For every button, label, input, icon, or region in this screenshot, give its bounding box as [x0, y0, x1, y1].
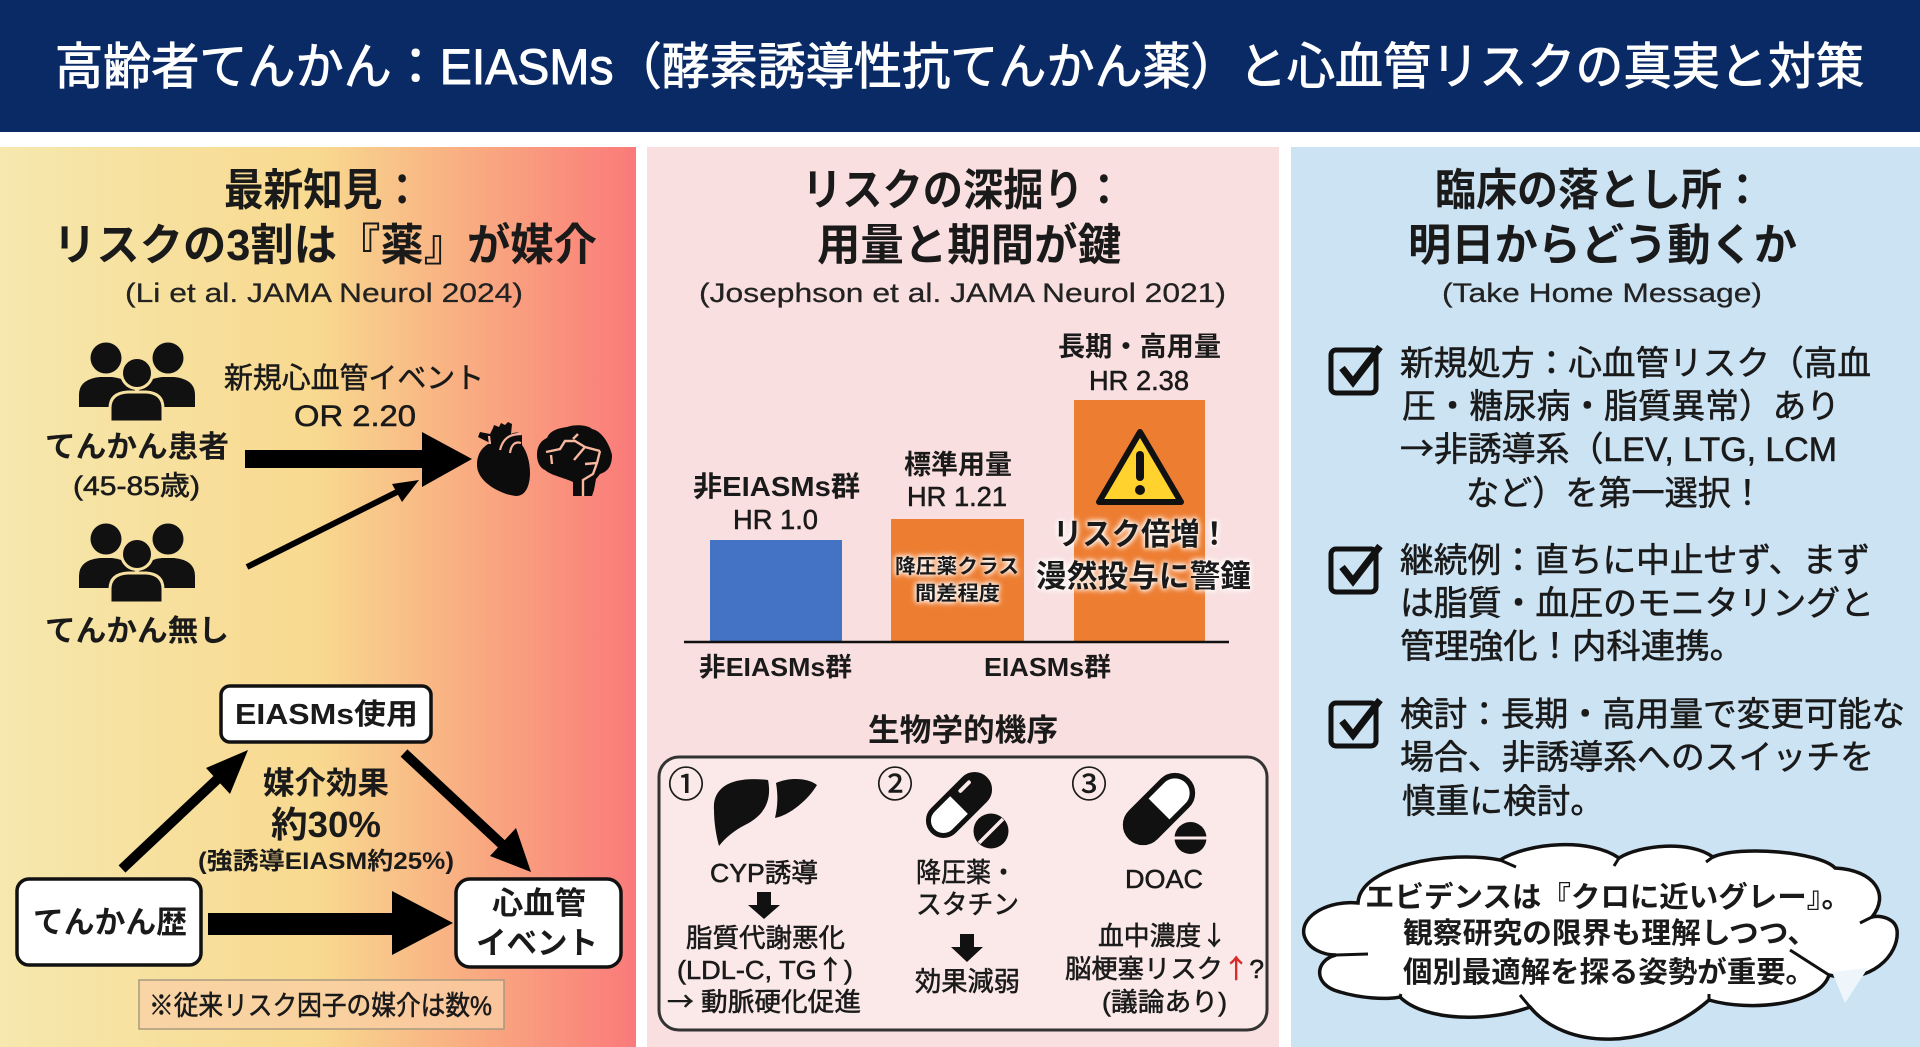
heading: clinical takeaways: 明日からどう動くか	[1408, 221, 1797, 270]
arrow: thin controls to outcome	[247, 480, 419, 567]
title: 高齢者てんかん：EIASMs（酵素誘導性抗てんかん薬）と心血管リスクの真実と対策	[55, 39, 1864, 95]
mechanism 3: DOAC	[1065, 764, 1264, 1017]
takeaway: new prescriptions: 新規処方：心血管リスク（高血	[1400, 345, 1871, 383]
label: long term high dose HR: 長期・高用量	[1058, 332, 1221, 362]
box: epilepsy history	[17, 879, 201, 965]
label: long term high dose HR	[1058, 332, 1221, 396]
takeaway: consider switching: 慎重に検討。	[1402, 783, 1604, 821]
takeaway: consider switching: 場合、非誘導系へのスイッチを	[1400, 739, 1874, 777]
label: mediation effect: 約30%	[271, 804, 381, 845]
box: EIASMs use	[221, 686, 431, 742]
label: new CV events OR	[224, 362, 484, 433]
mechanism 1: CYP induction: → 動脈硬化促進	[667, 982, 861, 1019]
icon: no epilepsy group	[79, 524, 195, 603]
label: no epilepsy: てんかん無し	[45, 615, 229, 648]
icon: warning triangle	[1099, 432, 1181, 502]
label: non EIASMs HR: HR 1.0	[733, 504, 818, 535]
icon: capsule with tablet	[921, 767, 1008, 848]
label: non EIASMs HR	[693, 471, 860, 535]
arrow: epilepsy to CV events	[208, 891, 453, 955]
note: conventional risk factors: ※従来リスク因子の媒介は数%	[149, 991, 492, 1021]
takeaway: new prescriptions: 圧・糖尿病・脂質異常）あり	[1402, 388, 1840, 426]
takeaway: consider switching	[1331, 696, 1905, 821]
label: epilepsy patients	[45, 431, 229, 501]
mechanism 2: antihypertensives and statins	[877, 764, 1020, 997]
takeaway: new prescriptions	[1331, 345, 1871, 513]
icon: checkbox	[1331, 347, 1380, 393]
annotation: antihypertensive class: 降圧薬クラス	[895, 555, 1019, 578]
panel: latest findings	[0, 147, 636, 1047]
mechanism 2: antihypertensives and statins: 降圧薬・	[916, 858, 1016, 888]
takeaway: new prescriptions: など）を第一選択！	[1466, 475, 1764, 513]
label: non EIASMs HR: 非EIASMs群	[693, 471, 860, 502]
box: CV events	[456, 879, 621, 967]
bar chart: hazard ratios	[684, 332, 1251, 682]
mechanism 1: CYP induction: (LDL-C, TG↑)	[677, 950, 853, 987]
box: CV events: イベント	[476, 926, 598, 961]
callout: evidence cloud: エビデンスは『クロに近いグレー』。	[1365, 880, 1851, 914]
label: mediation effect	[198, 766, 454, 875]
label: long term high dose HR: HR 2.38	[1089, 365, 1189, 396]
mechanism 3: DOAC: DOAC	[1125, 864, 1203, 894]
bar: long term high dose	[1074, 400, 1205, 641]
heading: risk deep dive	[802, 166, 1124, 270]
heading: clinical takeaways: 臨床の落とし所：	[1435, 166, 1763, 215]
heading: risk deep dive: リスクの深掘り：	[802, 166, 1124, 215]
box: EIASMs use: EIASMs使用	[235, 698, 418, 731]
axis label: EIASMs: EIASMs群	[984, 652, 1111, 682]
icon: brain	[537, 425, 612, 496]
header banner	[0, 0, 1920, 132]
mechanism 1: CYP induction: 脂質代謝悪化	[686, 923, 845, 953]
bar: non EIASMs	[710, 540, 842, 641]
arrow: thick patients to outcome	[245, 432, 472, 487]
callout: evidence cloud: 観察研究の限界も理解しつつ、	[1403, 917, 1817, 950]
mechanism 1: CYP induction	[667, 764, 861, 1019]
callout: evidence cloud	[1304, 845, 1897, 1039]
citation: Li et al: (Li et al. JAMA Neurol 2024)	[125, 278, 523, 308]
label: new CV events OR: 新規心血管イベント	[224, 362, 484, 395]
axis label: non EIASMs: 非EIASMs群	[699, 652, 852, 682]
arrow: epilepsy to EIASMs	[122, 750, 248, 869]
takeaway: continuing patients: 管理強化！内科連携。	[1400, 628, 1744, 666]
box: mechanisms	[659, 757, 1267, 1030]
mechanism 3: DOAC: (議論あり)	[1102, 987, 1227, 1017]
mechanism 3: DOAC: 脳梗塞リスク↑?	[1065, 949, 1264, 986]
panel: clinical takeaways	[1291, 147, 1920, 1047]
icon: liver	[714, 779, 817, 846]
annotation: antihypertensive class	[895, 555, 1019, 605]
label: mediation effect: (強誘導EIASM約25%)	[198, 848, 454, 875]
icon: checkbox	[1331, 546, 1380, 592]
mechanism 3: DOAC: 血中濃度↓	[1098, 916, 1227, 953]
annotation: antihypertensive class: 間差程度	[915, 582, 1000, 605]
heading: biological mechanism: 生物学的機序	[868, 713, 1058, 748]
label: standard dose HR	[904, 450, 1012, 512]
takeaway: new prescriptions: →非誘導系（LEV, LTG, LCM	[1400, 422, 1837, 471]
mechanism 2: antihypertensives and statins: 効果減弱	[915, 967, 1020, 997]
label: mediation effect: 媒介効果	[263, 766, 389, 801]
mechanism 2: antihypertensives and statins: ②	[877, 764, 913, 805]
icon: heart	[477, 422, 530, 496]
annotation: risk doubling	[1036, 517, 1251, 594]
heading: clinical takeaways	[1408, 166, 1797, 270]
note: conventional risk factors	[139, 980, 504, 1029]
mechanism 1: CYP induction: ①	[668, 764, 704, 805]
takeaway: continuing patients	[1331, 542, 1874, 666]
icon: checkbox	[1331, 700, 1380, 746]
bar: standard dose	[891, 519, 1024, 641]
heading: risk deep dive: 用量と期間が鍵	[817, 221, 1121, 270]
label: new CV events OR: OR 2.20	[294, 400, 416, 433]
icon: epilepsy patients group	[79, 342, 195, 422]
label: standard dose HR: 標準用量	[904, 450, 1012, 480]
icon: capsule with round tablet	[1115, 767, 1207, 854]
arrow: EIASMs to CV events	[404, 753, 531, 872]
mechanism 3: DOAC: ③	[1071, 764, 1107, 805]
callout: evidence cloud: 個別最適解を探る姿勢が重要。	[1403, 955, 1815, 989]
takeaway: continuing patients: 継続例：直ちに中止せず、まず	[1400, 542, 1870, 580]
citation: take home message: (Take Home Message)	[1442, 278, 1762, 308]
panel: risk deep dive	[647, 147, 1279, 1047]
label: standard dose HR: HR 1.21	[907, 481, 1007, 512]
mechanism 2: antihypertensives and statins: スタチン	[916, 890, 1019, 920]
label: epilepsy patients: (45-85歳)	[73, 471, 200, 501]
annotation: risk doubling: 漫然投与に警鐘	[1036, 559, 1251, 594]
heading: latest findings: リスクの3割は『薬』が媒介	[53, 221, 597, 270]
takeaway: continuing patients: は脂質・血圧のモニタリングと	[1400, 585, 1874, 623]
takeaway: consider switching: 検討：長期・高用量で変更可能な	[1400, 696, 1905, 734]
annotation: risk doubling: リスク倍増！	[1053, 517, 1229, 552]
citation: Josephson et al: (Josephson et al. JAMA Neurol 2021)	[699, 278, 1226, 308]
box: CV events: 心血管	[492, 886, 586, 921]
heading: latest findings: 最新知見：	[224, 166, 422, 215]
label: epilepsy patients: てんかん患者	[45, 431, 229, 464]
heading: latest findings	[53, 166, 597, 270]
mechanism 1: CYP induction: CYP誘導	[710, 858, 818, 888]
box: epilepsy history: てんかん歴	[33, 905, 187, 940]
